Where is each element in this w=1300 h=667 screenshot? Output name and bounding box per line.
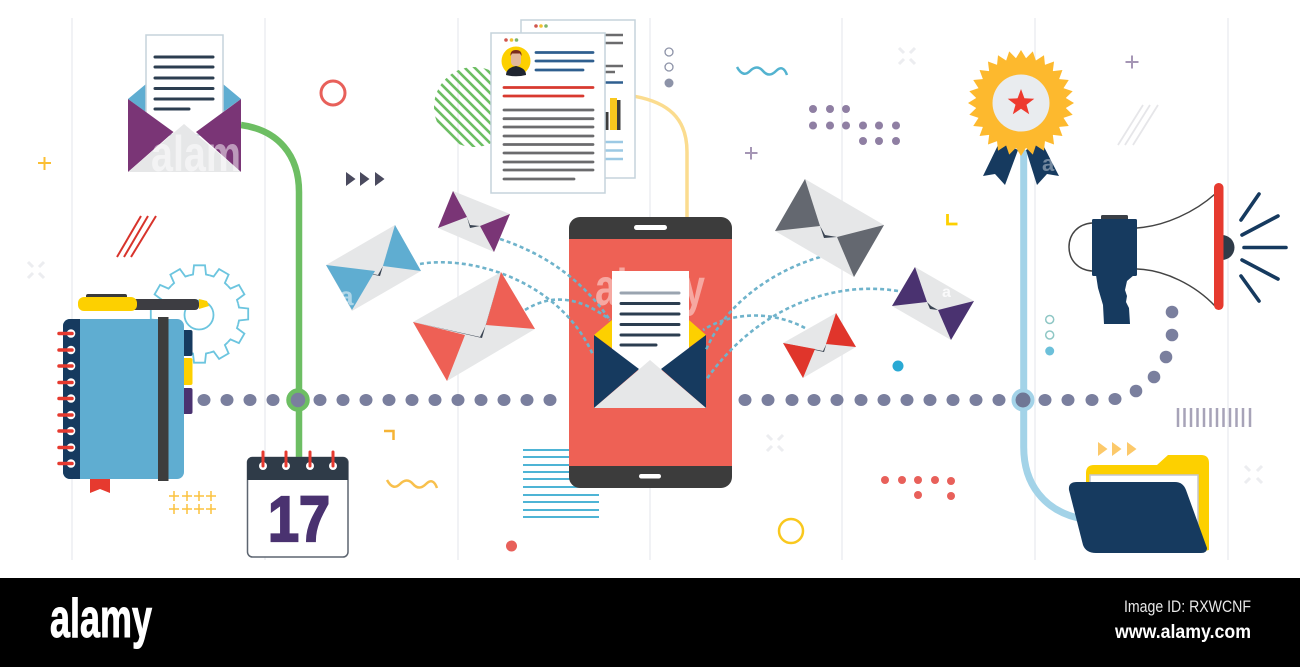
rosette disc bbox=[992, 74, 1050, 132]
purple plus bbox=[745, 147, 758, 160]
icon: grey envelope bbox=[775, 179, 884, 277]
screen bbox=[569, 239, 732, 466]
yellow wave bbox=[387, 480, 437, 488]
header lines bbox=[536, 52, 593, 70]
back dome bbox=[1222, 235, 1234, 260]
letter bbox=[612, 271, 689, 370]
dashed mail trails bbox=[420, 239, 898, 380]
envelope sides bbox=[128, 99, 241, 172]
yellow corner bbox=[948, 214, 958, 224]
small circle middle bbox=[665, 63, 673, 71]
grey stripes bbox=[1118, 105, 1158, 145]
yellow plus bbox=[38, 157, 51, 170]
red star bbox=[1008, 89, 1034, 114]
small filled circle bbox=[664, 78, 674, 88]
blue connector bbox=[1024, 150, 1078, 518]
footer bar bbox=[0, 578, 1300, 667]
icon: back document bbox=[521, 20, 635, 178]
purple plus right bbox=[1126, 56, 1138, 68]
envelope front bbox=[128, 124, 241, 172]
folder front bbox=[1069, 482, 1207, 553]
icon: open envelope top left bbox=[128, 35, 241, 182]
blue timeline node bbox=[1014, 390, 1032, 410]
body lines bbox=[504, 110, 593, 179]
timeline dots bbox=[198, 306, 1178, 406]
yellow plus grid bbox=[169, 491, 216, 514]
grey cross left bbox=[28, 262, 44, 278]
website: www.alamy.com bbox=[1114, 622, 1251, 643]
icon: red envelope bbox=[783, 313, 856, 378]
body bbox=[1092, 219, 1137, 276]
envelope sides bbox=[594, 335, 706, 408]
avatar bbox=[502, 46, 530, 76]
blue wave bbox=[737, 67, 787, 75]
icon: pen bbox=[78, 294, 209, 311]
icon: blue envelope bbox=[326, 225, 421, 311]
striped circle bbox=[434, 67, 490, 147]
home button bbox=[639, 474, 661, 478]
handle bbox=[1096, 275, 1134, 324]
icon: purple envelope right bbox=[892, 267, 974, 340]
icon: purple envelope left bbox=[438, 191, 510, 252]
icon: megaphone bbox=[1069, 183, 1286, 324]
horn outline bbox=[1069, 194, 1215, 306]
yellow arrows bbox=[1098, 442, 1136, 456]
icon: folder bbox=[1069, 455, 1209, 553]
spine bbox=[63, 319, 80, 479]
icon: phone bbox=[569, 217, 732, 488]
purple dot grid bbox=[809, 105, 900, 145]
phone watermark: alamy bbox=[595, 259, 705, 317]
decorative accents bbox=[28, 48, 1262, 543]
watermark: alam bbox=[151, 126, 241, 182]
red stripes bbox=[117, 216, 156, 257]
rosette spikes bbox=[968, 50, 1074, 156]
yellow connector bbox=[633, 96, 687, 218]
orange corner bbox=[384, 431, 394, 440]
letter lines bbox=[155, 57, 213, 109]
grey cross right bbox=[1245, 466, 1262, 483]
folder back bbox=[1086, 455, 1209, 552]
icon: resume front document bbox=[491, 33, 605, 193]
image id: Image ID: RXWCNF bbox=[1124, 597, 1251, 616]
ribbon watermark: a bbox=[1042, 151, 1055, 176]
grey cross top bbox=[899, 48, 915, 64]
ring right lower bbox=[1046, 331, 1054, 339]
small circles top bbox=[665, 48, 673, 56]
red ring bbox=[321, 81, 345, 105]
rings right bbox=[1046, 316, 1054, 324]
flaps bbox=[594, 320, 706, 376]
green timeline node bbox=[288, 390, 308, 410]
icon: notebook bbox=[59, 317, 192, 493]
ribbon tails bbox=[983, 141, 1059, 185]
tabs bbox=[182, 330, 192, 356]
icon: coral envelope bbox=[413, 272, 535, 381]
icon: award rosette bbox=[968, 50, 1074, 185]
top cap bbox=[1101, 215, 1128, 221]
paper bbox=[1090, 475, 1198, 525]
speaker bbox=[634, 225, 667, 230]
yellow ring bbox=[779, 519, 803, 543]
calendar header bbox=[247, 457, 348, 480]
alamy logo: alamy bbox=[50, 587, 152, 649]
icon: calendar bbox=[247, 452, 348, 557]
green connector bbox=[241, 125, 299, 460]
red dot grid bbox=[881, 476, 955, 500]
letter bbox=[146, 35, 223, 135]
red dot bbox=[506, 540, 517, 552]
grey cross centre bbox=[767, 435, 783, 451]
blue line block bbox=[523, 450, 599, 517]
red rim bbox=[1214, 183, 1224, 310]
barcode bbox=[1178, 408, 1250, 427]
envelope front bbox=[594, 360, 706, 408]
blue dot bbox=[892, 360, 904, 372]
date: 17 bbox=[268, 483, 330, 555]
dark arrows bbox=[346, 172, 384, 186]
red lines bbox=[504, 88, 593, 96]
calendar rings bbox=[259, 452, 337, 470]
strap bbox=[158, 317, 168, 481]
filled ring right bbox=[1045, 346, 1054, 356]
icon: purple envelope right: a bbox=[942, 284, 951, 301]
sound rays bbox=[1241, 194, 1286, 301]
letter lines bbox=[621, 304, 679, 345]
cover bbox=[63, 319, 184, 479]
icon: blue envelope: a bbox=[339, 281, 354, 311]
bookmark bbox=[90, 478, 110, 493]
icon: gear bbox=[151, 265, 248, 363]
spiral rings bbox=[59, 329, 75, 468]
